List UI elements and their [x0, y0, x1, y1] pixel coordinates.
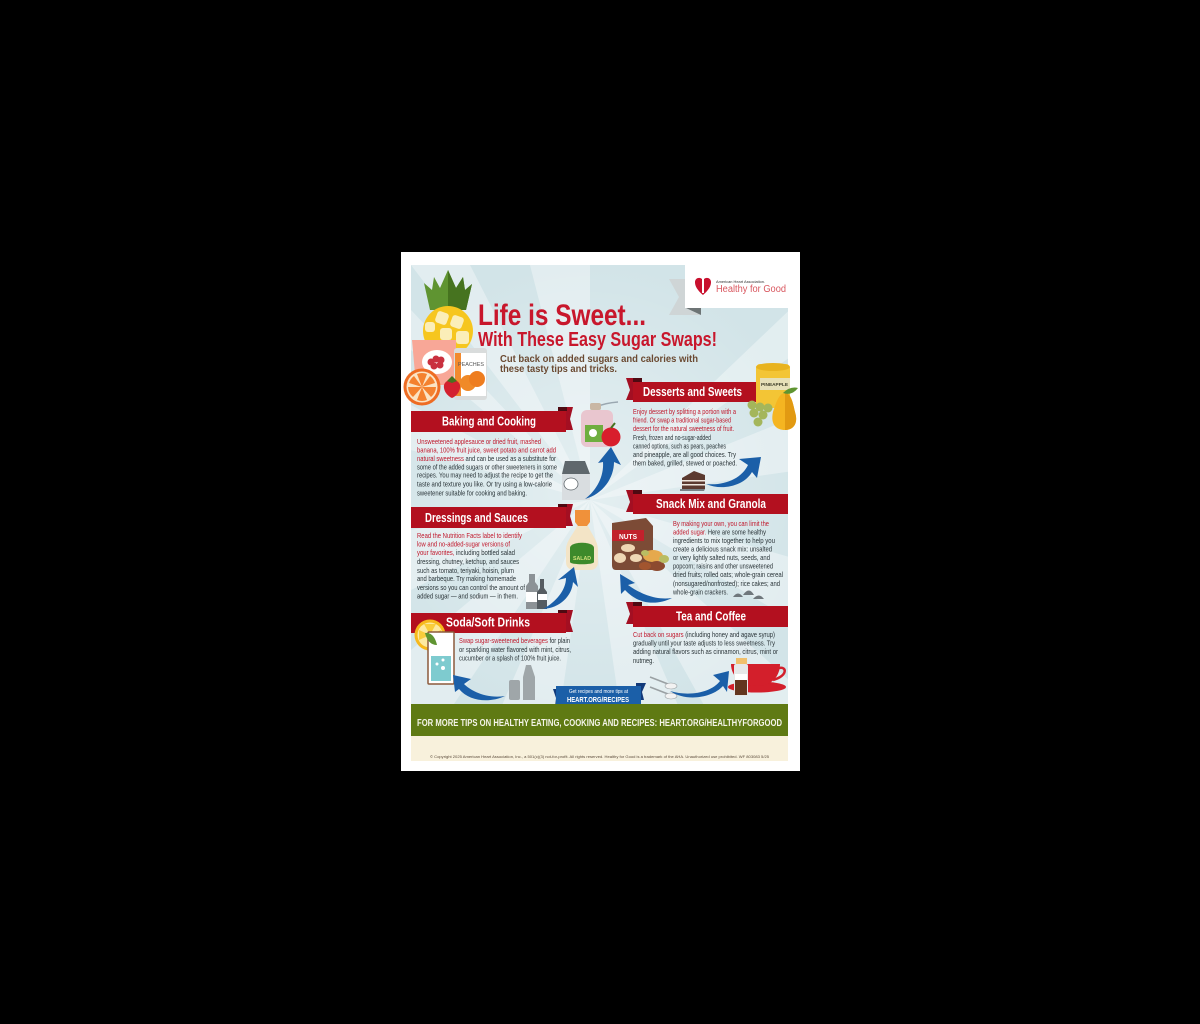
body text: sweetener suitable for cooking and baking. [417, 488, 527, 498]
body text: Enjoy dessert by splitting a portion with a [633, 407, 736, 416]
body text: Cut back on sugars (including honey and agave syrup) [633, 630, 775, 639]
panel: snack mix and granola [626, 490, 788, 596]
icon: apple [602, 423, 620, 446]
icon: nuts bag [612, 518, 653, 570]
icon: layered cake [680, 471, 705, 491]
arrow: bottles to salad dressing [543, 567, 578, 609]
arrow: spoons to coffee [670, 671, 729, 697]
body text: versions so you can control the amount of [417, 583, 525, 592]
ribbon heading: Dressings and Sauces [425, 511, 528, 525]
body text [633, 407, 737, 468]
icon: sugar jar with spoon [581, 402, 618, 447]
ribbon heading [626, 490, 788, 514]
green footer band: FOR MORE TIPS ON HEALTHY EATING, COOKING AND RECIPES: HEART.ORG/HEALTHYFORGOOD [417, 717, 782, 729]
panel: desserts and sweets [626, 378, 757, 468]
body text: dried fruits; rolled oats; whole-grain cereal [673, 570, 783, 579]
ribbon heading: Baking and Cooking [442, 414, 536, 428]
icon: sugar carton [562, 461, 590, 500]
icon: strawberry [444, 376, 460, 398]
copyright strip [411, 736, 788, 761]
icon: salad dressing bottle [566, 510, 598, 570]
body text: natural sweetness and can be used as a substitute for [417, 454, 556, 463]
icon: glass of water [425, 632, 454, 684]
body text: dressing, chutney, ketchup, and sauces [417, 557, 519, 566]
icon: fruit pouch [412, 340, 456, 385]
panel: dressings and sauces [411, 504, 573, 600]
body text: By making your own, you can limit the [673, 519, 769, 528]
title [478, 299, 717, 351]
body text: canned options, such as pears, peaches [633, 442, 726, 450]
body text [417, 437, 557, 498]
body text: recipes. You may need to adjust the recipe to get the [417, 470, 553, 480]
ribbon heading [411, 407, 573, 432]
ribbon heading: Tea and Coffee [676, 610, 746, 624]
arrow: cake to desserts [706, 457, 761, 487]
title: With These Easy Sugar Swaps! [478, 329, 717, 351]
organisation name: American Heart Association. [716, 279, 765, 284]
body text: or very lightly salted nuts, seeds, and [673, 553, 770, 562]
body text: such as tomato, teriyaki, hoisin, plum [417, 566, 514, 575]
icon: mixed nuts [639, 550, 669, 571]
ribbon heading: Snack Mix and Granola [656, 497, 767, 511]
ribbon heading: Soda/Soft Drinks [446, 616, 530, 630]
icon: spice jar [734, 658, 748, 696]
body text: and barbeque. Try making homemade [417, 574, 516, 583]
icon: pineapple can: PINEAPPLE [761, 382, 788, 387]
subtitle [500, 354, 698, 375]
body text [672, 519, 783, 596]
panel: tea and coffee [626, 602, 788, 665]
icon: grapes [748, 400, 772, 426]
infographic poster [401, 252, 800, 771]
body text: your favorites, including bottled salad [417, 548, 515, 557]
ribbon heading [411, 504, 573, 528]
white page [401, 252, 800, 771]
ribbon heading [626, 602, 788, 627]
body text: friend. Or swap a traditional sugar-based [633, 416, 731, 424]
icon: grey sauce bottles [526, 574, 547, 609]
body text: popcorn; raisins and other unsweetened [673, 562, 773, 570]
icon: nuts bag: NUTS [619, 532, 637, 541]
arrow: snack mix to nuts [620, 574, 672, 603]
body text: taste and texture you like. Or try using a low-calorie [417, 480, 552, 488]
banner: recipes link [553, 683, 646, 707]
body text: some of the added sugars or other sweeteners in some [417, 462, 557, 472]
icon: pineapple [423, 270, 473, 356]
arrow: can to glass [453, 675, 505, 700]
icon: peaches can [454, 348, 487, 400]
body text: whole-grain crackers. [672, 588, 728, 596]
body text: Unsweetened applesauce or dried fruit, mashed [417, 437, 541, 446]
subtitle: Cut back on added sugars and calories with [500, 354, 698, 365]
icon: red coffee cup [728, 664, 786, 692]
body text: Fresh, frozen and no-sugar-added [633, 433, 711, 442]
icon: orange slice [404, 368, 440, 406]
panel: baking and cooking [411, 407, 573, 498]
body text: (nonsugared/nonfrosted); rice cakes; and [673, 579, 780, 588]
body text: and pineapple, are all good choices. Try [633, 450, 736, 459]
logo block [669, 265, 800, 315]
ribbon heading: Desserts and Sweets [643, 385, 742, 399]
ribbon heading [411, 610, 573, 633]
copyright strip: © Copyright 2025 American Heart Association, Inc., a 501(c)(3) not-for-profit. All rights reserved. Healthy for Good is a trademark of the AHA. Unauthorized use prohibited. WF 803083 5/25 [430, 754, 770, 759]
body text: or sparkling water flavored with mint, citrus, [459, 645, 571, 654]
icon: lemon slice [414, 620, 446, 650]
panel: soda and soft drinks [411, 610, 573, 662]
body text: them baked, grilled, stewed or poached. [633, 458, 737, 468]
body text: adding natural flavors such as cinnamon, citrus, mint or [633, 647, 778, 656]
body text: ingredients to mix together to help you [673, 536, 775, 545]
body text: added sugar. Here are some healthy [673, 528, 766, 536]
body text: gradually until your taste adjusts to less sweetness. Try [633, 638, 775, 648]
can label: PEACHES [458, 362, 485, 368]
arrow: baking to jar [585, 447, 621, 499]
body text: Swap sugar-sweetened beverages for plain [459, 636, 570, 645]
body text: banana, 100% fruit juice, sweet potato and carrot add [417, 446, 556, 454]
body text: Read the Nutrition Facts label to identify [417, 531, 522, 540]
body text: cucumber or a splash of 100% fruit juice. [459, 654, 561, 662]
icon: chocolate chips [733, 590, 764, 599]
body text: added sugar — and sodium — in them. [417, 592, 518, 600]
banner: recipes link: Get recipes and more tips at [569, 689, 629, 695]
body text: create a delicious snack mix: unsalted [673, 544, 772, 554]
body text [633, 630, 778, 665]
healthy for good wordmark: Healthy for Good [716, 284, 786, 295]
green footer band [411, 704, 788, 736]
icon: grey can and bottle [509, 665, 535, 700]
body text [459, 636, 571, 662]
sunburst background [411, 265, 788, 704]
icon: pear [772, 388, 798, 430]
body text: nutmeg. [633, 656, 654, 665]
icon: sugar spoons [650, 677, 677, 699]
body text [417, 531, 525, 600]
banner: recipes link: HEART.ORG/RECIPES [567, 697, 629, 704]
icon: heart and torch [695, 278, 711, 295]
icon: salad dressing bottle: SALAD [573, 556, 591, 562]
icon: pineapple can [756, 363, 790, 408]
subtitle: these tasty tips and tricks. [500, 364, 617, 375]
title: Life is Sweet... [478, 299, 646, 332]
body text: dessert for the natural sweetness of fruit. [633, 424, 734, 433]
body text: low and no-added-sugar versions of [417, 540, 510, 548]
